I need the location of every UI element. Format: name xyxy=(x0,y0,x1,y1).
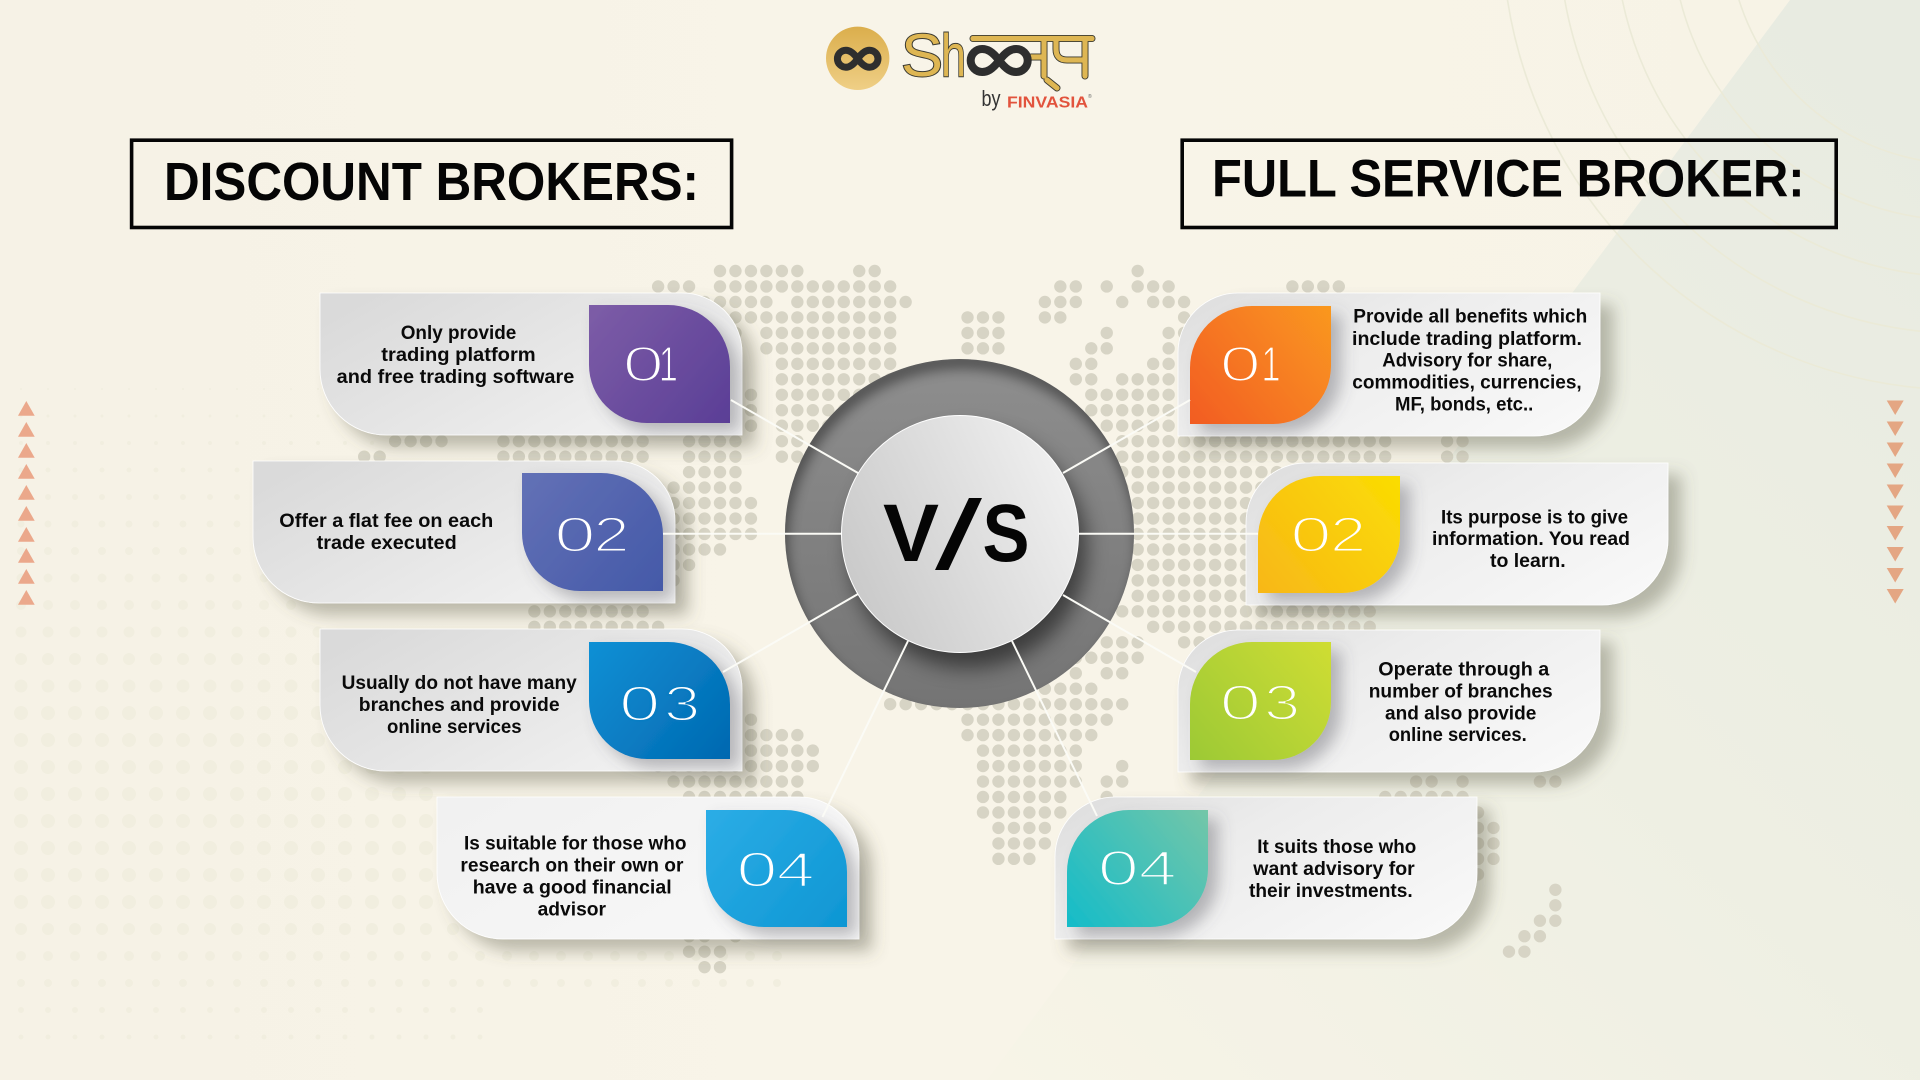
text: discount 01 xyxy=(337,322,574,388)
heading: discount brokers xyxy=(132,140,732,228)
text: full service 01 xyxy=(1352,306,1587,416)
badge: 03 blue: 3 xyxy=(664,678,700,732)
text: full service 04: It suits those who xyxy=(1257,836,1416,858)
text: full service 03: and also provide xyxy=(1385,702,1536,724)
text: discount 02: trade executed xyxy=(317,532,457,554)
badge: 02 blue xyxy=(522,473,663,591)
badge: 02 blue: 0 xyxy=(554,509,596,563)
badge: 03 blue: 0 xyxy=(619,678,660,732)
badge: 03 green xyxy=(1190,642,1331,760)
heading: full service broker xyxy=(1182,140,1836,228)
text: discount 03: online services xyxy=(387,716,522,738)
badge: 04 sky blue xyxy=(706,810,847,927)
centre circle with V/S: S xyxy=(982,488,1030,579)
panel: discount 03 xyxy=(320,629,742,771)
badge: 04 teal xyxy=(1067,810,1208,927)
badge: 02 yellow xyxy=(1258,476,1400,593)
text: discount 01: Only provide xyxy=(401,322,516,344)
panel: full service 03 xyxy=(1178,630,1600,772)
logo: Shoonya by Finvasia xyxy=(826,22,1092,112)
logo byline: by xyxy=(982,86,1000,111)
text: full service 03 xyxy=(1369,658,1553,746)
text: discount 01: trading platform xyxy=(381,344,536,366)
panel: discount 04 xyxy=(437,797,859,939)
badge: 02 yellow: 2 xyxy=(1330,509,1366,563)
icon: gold infinity badge xyxy=(826,27,889,90)
text: full service 02: information. You read xyxy=(1432,528,1630,550)
text: full service 01: include trading platform. xyxy=(1352,328,1582,350)
heading: discount brokers: DISCOUNT BROKERS: xyxy=(164,152,699,212)
logo wordmark Sh: h xyxy=(941,22,966,89)
badge: 01 orange: 1 xyxy=(1262,338,1280,392)
heading: full service broker: FULL SERVICE BROKER: xyxy=(1212,150,1804,208)
text: discount 04: Is suitable for those who xyxy=(464,832,687,854)
centre ring xyxy=(780,359,1144,725)
badge: 04 sky blue: 0 xyxy=(736,844,778,898)
text: full service 02 xyxy=(1432,506,1630,572)
badge: 01 orange xyxy=(1190,306,1331,424)
text: discount 03: Usually do not have many xyxy=(342,672,577,694)
text: full service 02: to learn. xyxy=(1490,550,1566,572)
badge: 01 purple xyxy=(589,305,730,423)
text: full service 02: Its purpose is to give xyxy=(1441,506,1628,528)
badge: 03 green: 3 xyxy=(1264,676,1300,730)
panel: discount 01 xyxy=(320,293,742,435)
text: discount 03 xyxy=(342,672,577,738)
badge: 01 purple: 0 xyxy=(623,338,664,392)
badge: 02 yellow: 0 xyxy=(1290,509,1332,563)
badge: 04 teal: 4 xyxy=(1139,842,1177,896)
text: discount 01: and free trading software xyxy=(337,366,574,388)
panel: full service 02 xyxy=(1246,463,1668,605)
centre circle with V/S xyxy=(842,416,1078,652)
text: discount 02 xyxy=(279,510,493,554)
centre circle with V/S: / xyxy=(935,480,983,590)
dotted world map xyxy=(364,271,1556,967)
text: full service 01: commodities, currencies, xyxy=(1352,372,1582,394)
badge: 03 blue xyxy=(589,642,730,759)
badge: 04 teal: 0 xyxy=(1098,842,1139,896)
text: full service 04: their investments. xyxy=(1249,880,1413,902)
text: full service 01: Advisory for share, xyxy=(1382,350,1552,372)
connector lines xyxy=(663,400,1258,817)
panel: full service 04 xyxy=(1055,797,1477,939)
text: discount 04: have a good financial xyxy=(473,876,672,898)
text: discount 02: Offer a flat fee on each xyxy=(279,510,493,532)
logo mark: infinity and Devanagari strokes xyxy=(971,38,1092,88)
text: discount 04 xyxy=(460,832,687,920)
text: full service 03: Operate through a xyxy=(1378,658,1550,680)
text: full service 01: Provide all benefits which xyxy=(1353,306,1587,328)
text: full service 04: want advisory for xyxy=(1252,858,1415,880)
text: discount 04: research on their own or xyxy=(460,854,684,876)
text: full service 03: number of branches xyxy=(1369,680,1553,702)
text: full service 03: online services. xyxy=(1389,724,1527,746)
centre circle with V/S: V xyxy=(883,488,939,579)
decorative arrows: left column xyxy=(18,401,35,605)
text: discount 03: branches and provide xyxy=(359,694,560,716)
logo byline brand: FINVASIA xyxy=(1007,94,1088,112)
badge: 01 orange: 0 xyxy=(1220,338,1261,392)
text: full service 04 xyxy=(1249,836,1416,902)
decorative arrows: right column xyxy=(1887,400,1904,604)
panel: discount 02 xyxy=(253,461,675,603)
logo wordmark Sh: S xyxy=(901,22,943,89)
badge: 02 blue: 2 xyxy=(593,509,630,563)
panel: full service 01 xyxy=(1178,293,1600,436)
text: discount 04: advisor xyxy=(538,898,606,920)
badge: 04 sky blue: 4 xyxy=(777,844,815,898)
badge: 03 green: 0 xyxy=(1220,676,1261,730)
badge: 01 purple: 1 xyxy=(659,338,678,392)
text: full service 01: MF, bonds, etc.. xyxy=(1395,394,1533,416)
registered mark: ® xyxy=(1088,93,1092,100)
